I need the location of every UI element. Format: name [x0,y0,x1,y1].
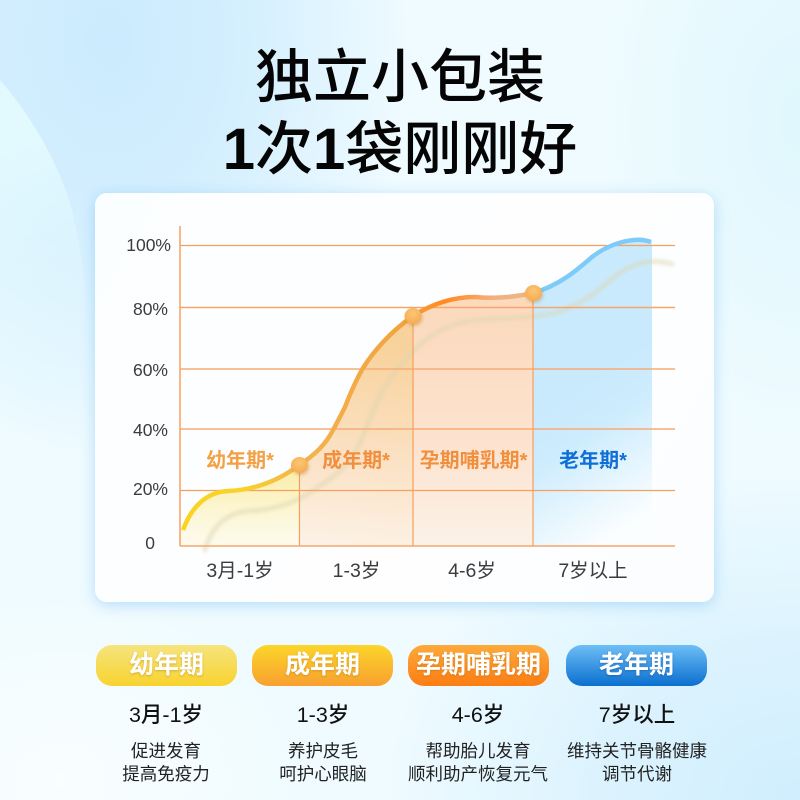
main curve [183,240,651,530]
age: senior: 7岁以上 [599,703,675,727]
pill: infant [96,645,237,686]
y axis labels: 100% [126,235,171,255]
column: senior [566,645,707,784]
age: adult: 1-3岁 [297,703,349,727]
benefits: senior: 维持关节骨骼健康 [567,740,707,760]
benefits: senior [567,740,707,784]
y axis labels: 40% [133,420,168,440]
area fills [181,240,652,546]
benefits: adult [279,740,367,784]
benefits: senior: 调节代谢 [602,764,672,784]
y axis labels: 60% [133,360,168,380]
column: infant [96,645,237,784]
benefits: pregnancy [408,740,548,784]
x axis labels: 3月-1岁 [206,560,274,582]
benefits: infant: 提高免疫力 [122,764,210,784]
shadow curve [205,262,672,550]
pill: adult [252,645,393,686]
pill: pregnancy [408,645,549,686]
x axis labels: 7岁以上 [558,560,628,582]
y axis labels: 20% [133,479,168,499]
age: pregnancy: 4-6岁 [452,703,504,727]
benefits: infant: 促进发育 [131,740,201,760]
title line 1: 独立小包装 [255,45,545,110]
pill: senior [566,645,707,686]
panel: chart card [95,193,714,602]
grid lines [180,226,675,546]
data points [291,285,542,473]
stage labels: 孕期哺乳期* [420,449,528,472]
pill: senior: 老年期 [599,651,674,679]
y axis labels [126,235,171,553]
benefits: adult: 呵护心眼脑 [279,764,367,784]
title line 2: 1次1袋刚刚好 [223,117,577,182]
pill: infant: 幼年期 [129,651,204,679]
stage labels [206,448,627,472]
stage labels: 老年期* [559,449,627,472]
benefits: adult: 养护皮毛 [288,740,358,760]
benefits: infant [122,740,210,784]
stage labels: 幼年期* [206,449,274,472]
y axis labels: 0 [145,533,155,553]
benefits: pregnancy: 帮助胎儿发育 [426,740,530,760]
pill: pregnancy: 孕期哺乳期 [416,651,541,679]
column: pregnancy [408,645,549,784]
benefits: pregnancy: 顺利助产恢复元气 [408,764,548,784]
x axis labels: 1-3岁 [333,560,380,582]
x axis labels: 4-6岁 [448,560,496,582]
stage labels: 成年期* [322,448,390,472]
age: infant: 3月-1岁 [129,703,203,727]
column: adult [252,645,393,784]
x axis labels [206,560,628,582]
y axis labels: 80% [133,299,168,319]
pill: adult: 成年期 [285,651,360,679]
